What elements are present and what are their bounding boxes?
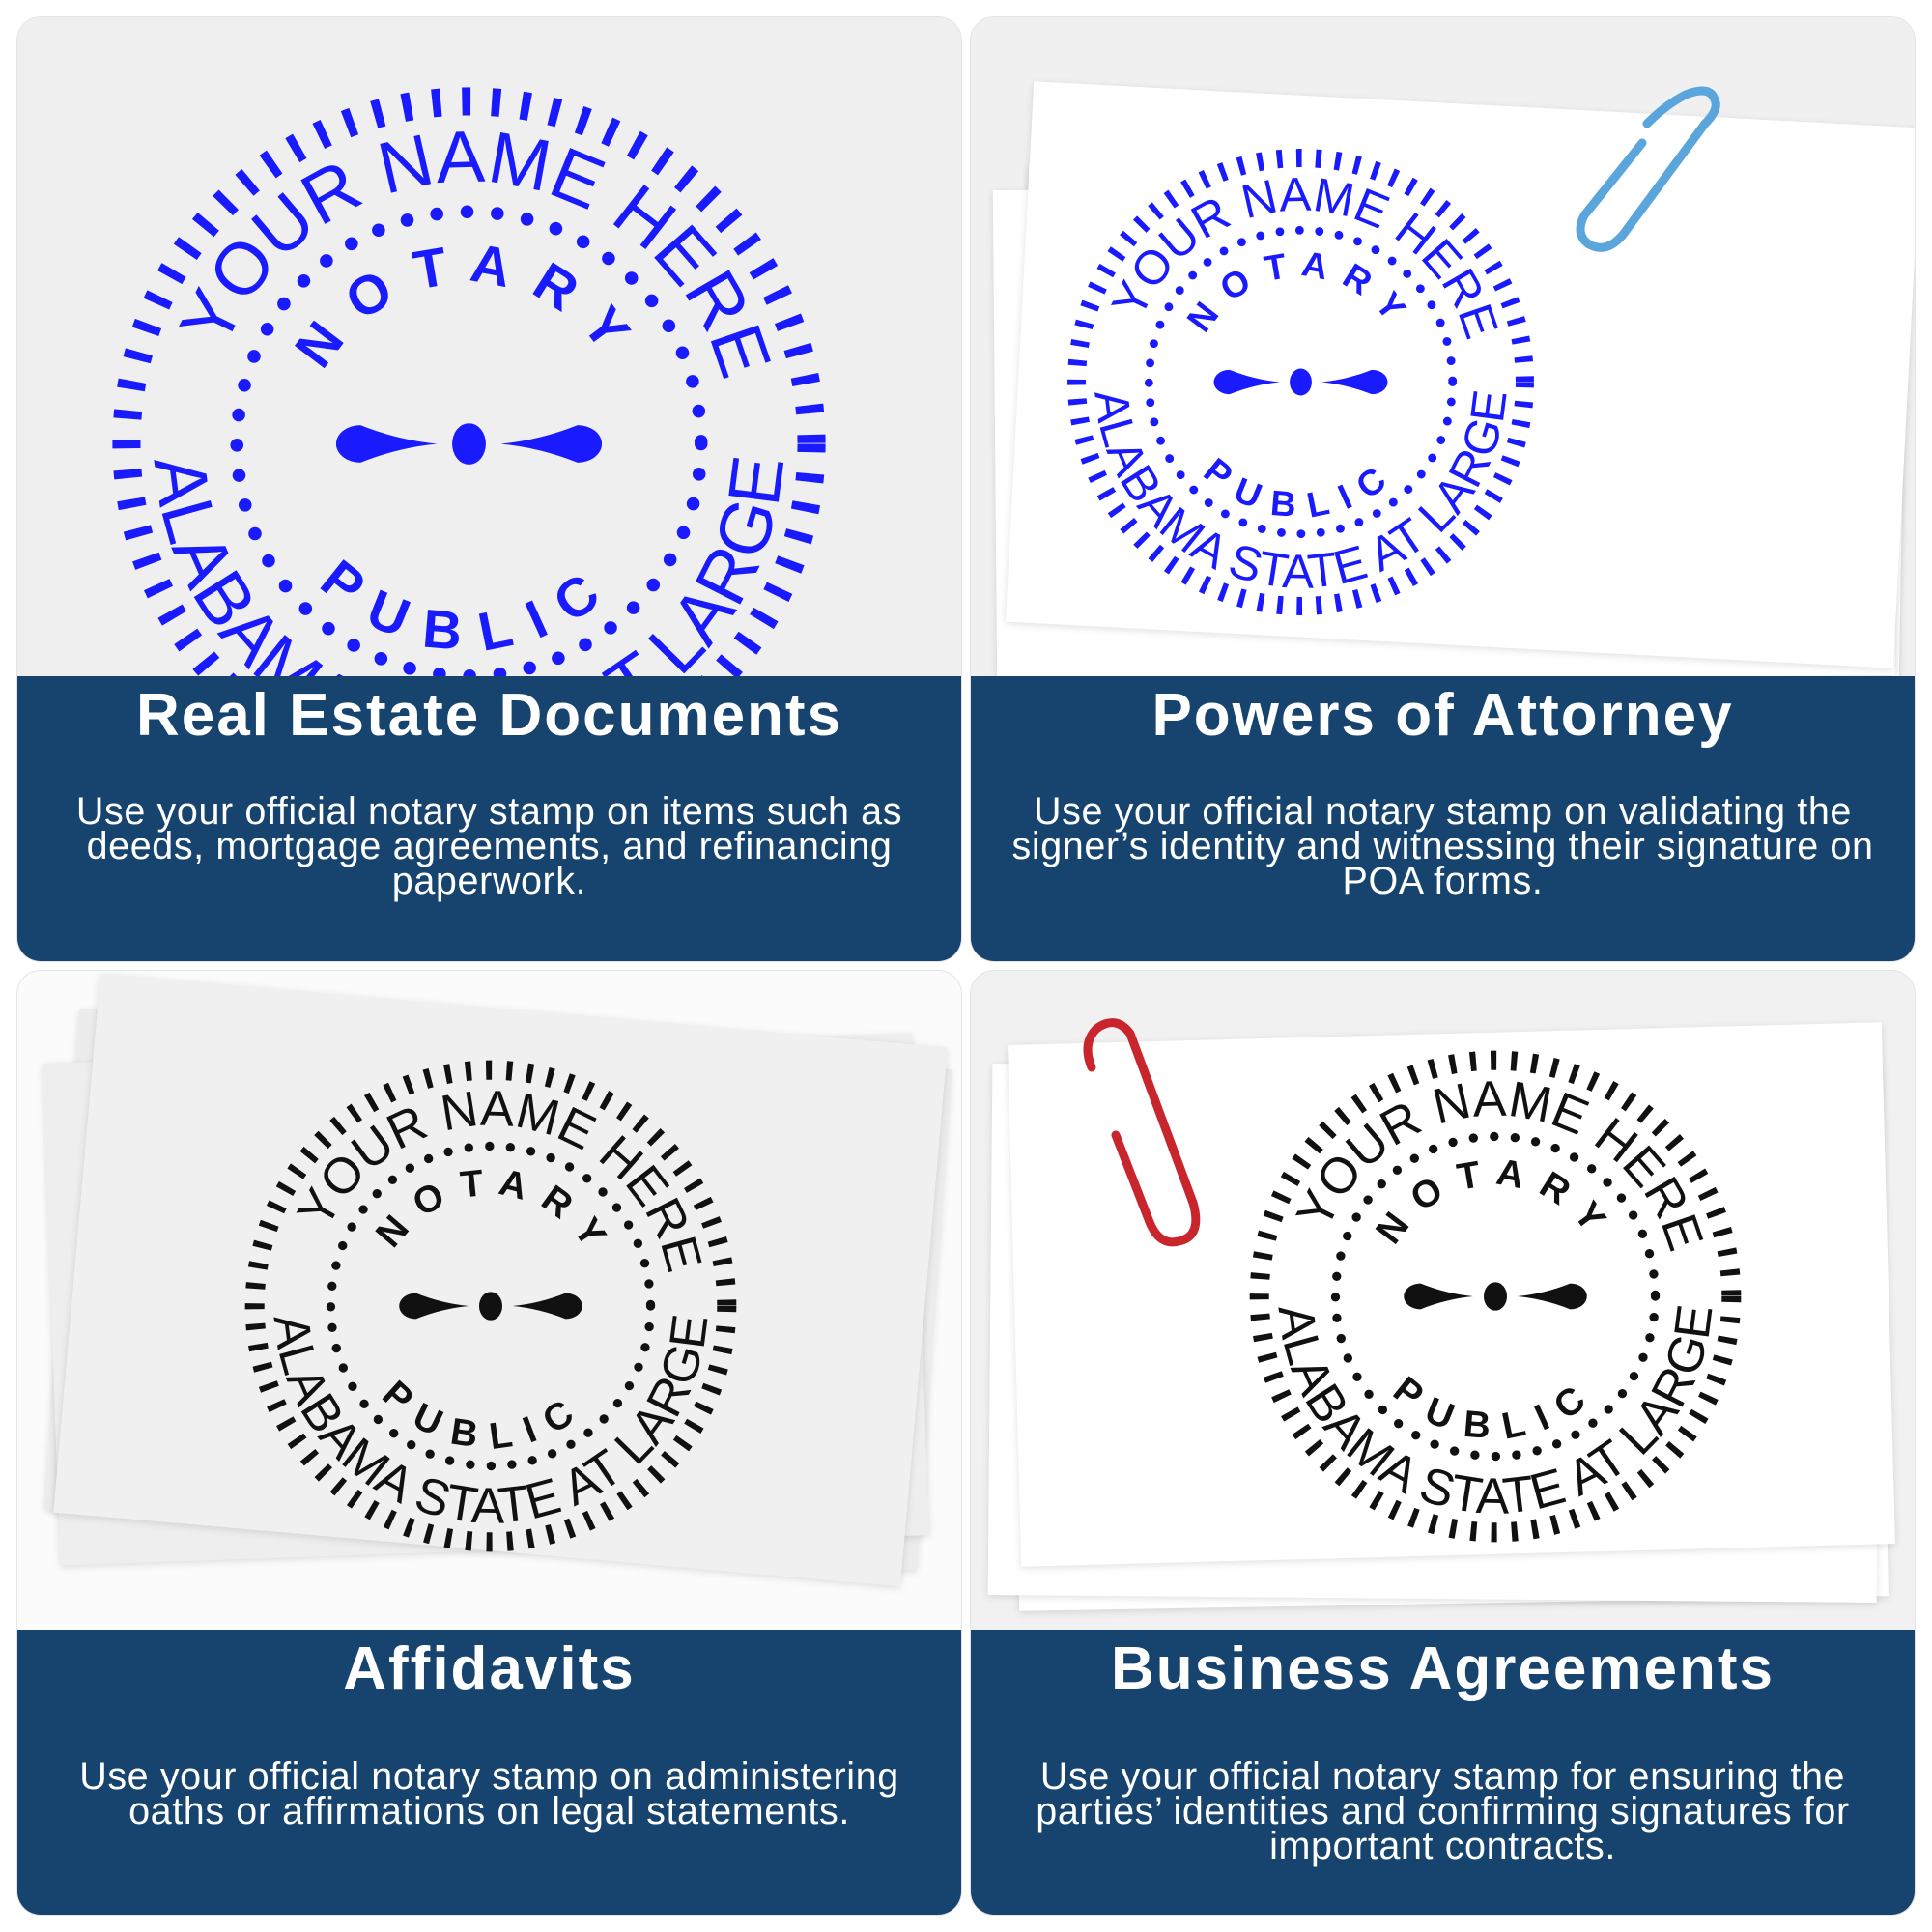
panel: powers of attorney [971, 17, 1915, 961]
panel: affidavits [17, 971, 961, 1915]
photo: blue stamp close-up [17, 17, 961, 677]
heading: Business Agreements [1111, 1635, 1775, 1702]
text block: important contracts. [1269, 1825, 1616, 1867]
stamp: black: YOUR NAME HERE [296, 1091, 701, 1273]
photo: textured card stack [17, 971, 961, 1631]
caption: real estate [17, 676, 961, 961]
stamp: black: NOTARY [1376, 1159, 1607, 1244]
icon: blue paperclip [1577, 87, 1720, 252]
text block: oaths or affirmations on legal statements. [128, 1790, 850, 1833]
text block: signer’s identity and witnessing their signature on [1011, 825, 1874, 867]
panel: real estate [17, 17, 961, 961]
photo: white cards with red paperclip [971, 971, 1915, 1631]
stamp: blue: PUBLIC [1204, 458, 1384, 518]
stamp: blue large [112, 87, 826, 676]
stamp: blue: YOUR NAME HERE [1111, 178, 1498, 340]
stamp: blue: ALABAMA STATE AT LARGE [1094, 391, 1507, 588]
caption: powers of attorney [971, 676, 1915, 961]
text block: Use your official notary stamp on items such as [76, 790, 902, 833]
panel: business agreements [971, 971, 1915, 1915]
text block [76, 790, 902, 902]
heading: Real Estate Documents [136, 682, 842, 749]
stamp: black: ALABAMA STATE AT LARGE [1278, 1306, 1712, 1514]
text block: POA forms. [1343, 860, 1543, 902]
stamp: blue [1067, 149, 1534, 615]
stamp: blue: NOTARY [1186, 253, 1407, 332]
caption: affidavits [17, 1630, 961, 1915]
text block: Use your official notary stamp on validating the [1034, 790, 1852, 833]
caption: business agreements [971, 1630, 1915, 1915]
text block [79, 1755, 899, 1833]
stamp: black: YOUR NAME HERE [1295, 1081, 1704, 1252]
photo: white cards with blue paperclip [971, 17, 1915, 677]
stamp: black: PUBLIC [1393, 1376, 1583, 1439]
text block: deeds, mortgage agreements, and refinancing [87, 825, 892, 867]
heading: Affidavits [343, 1635, 636, 1702]
text block: parties’ identities and confirming signatures for [1036, 1790, 1850, 1833]
stamp: black [1250, 1051, 1741, 1542]
stamp: blue large: NOTARY [295, 245, 632, 369]
text block [1036, 1755, 1850, 1867]
heading: Powers of Attorney [1151, 682, 1734, 749]
icon: red paperclip [1083, 1018, 1200, 1246]
text block: Use your official notary stamp on administering [79, 1755, 899, 1798]
text block: Use your official notary stamp for ensuring the [1040, 1755, 1845, 1798]
stamp: black: ALABAMA STATE AT LARGE [273, 1316, 707, 1523]
stamp: black: PUBLIC [383, 1379, 572, 1449]
text block [1011, 790, 1874, 902]
stamp: black [245, 1061, 736, 1551]
text block: paperwork. [392, 860, 586, 902]
stamp: black: NOTARY [375, 1169, 608, 1248]
stamp: blue large: PUBLIC [321, 559, 597, 651]
stamp: blue large: YOUR NAME HERE [179, 131, 771, 379]
